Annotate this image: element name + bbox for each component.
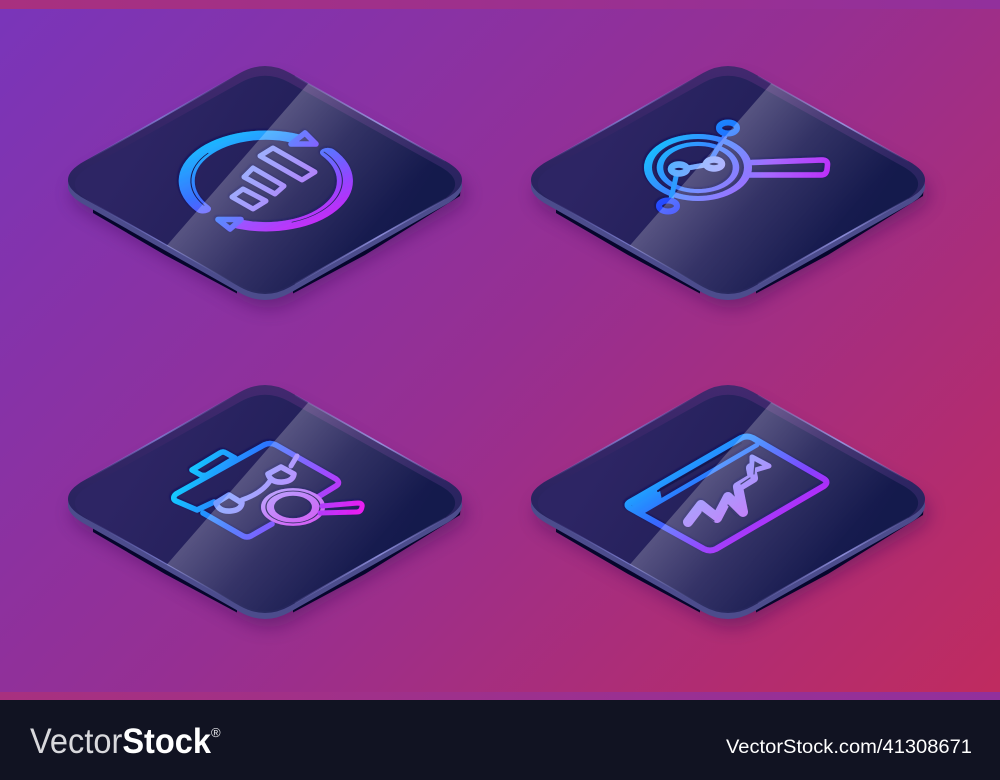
icon: magnifying glass with data nodes [648,122,828,212]
icon: rotating arrows around bars [187,133,345,229]
image reference: VectorStock.com/41308671 [726,737,972,758]
panel: tile with cycle and bar chart icon [68,55,505,308]
icon: briefcase with magnifier [174,444,362,537]
panel: tile with briefcase search icon [68,374,505,627]
footer bar [0,700,1000,780]
panel: tile with magnifier analysis icon [531,55,968,308]
logo wordmark: VectorStock [30,722,211,761]
registered mark: ® [211,725,221,740]
icon: browser window with rising zigzag [628,436,826,550]
panel: tile with browser chart icon [531,374,968,627]
